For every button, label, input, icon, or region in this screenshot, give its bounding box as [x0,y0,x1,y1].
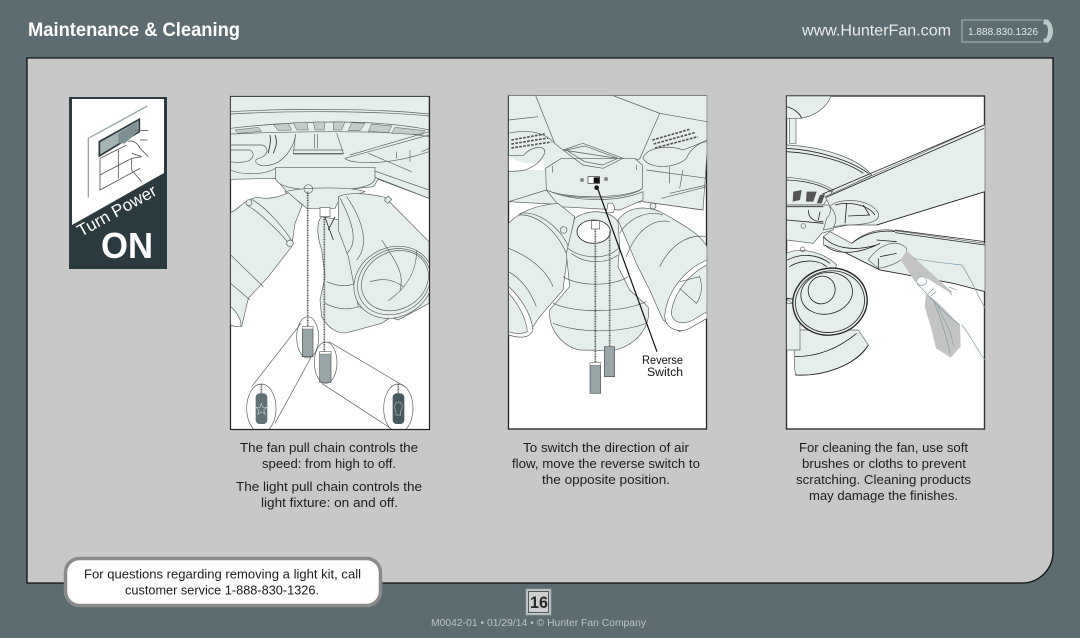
page number: 16 [530,593,548,612]
phone number badge [962,20,1053,42]
pull chains [590,221,615,393]
page number [526,590,550,614]
reverse switch label [642,355,683,379]
website address: www.HunterFan.com [801,22,951,40]
reverse switch label: Switch [647,367,683,379]
text: cleaning instructions: may damage the finishes. [809,488,958,503]
panel: pull chains illustration [230,96,446,433]
title: Maintenance & Cleaning [28,20,240,41]
text: pull chain instructions: speed: from high to off. [262,456,396,471]
panel: cleaning illustration [786,96,985,429]
text: cleaning instructions: brushes or cloths to prevent [802,456,966,471]
icon: turn power on [69,97,167,269]
centre lamp [550,203,649,351]
callout: customer service [66,558,380,606]
text: cleaning instructions: scratching. Cleaning products [796,472,972,487]
right lamp [338,193,429,320]
callout: customer service: customer service 1-888-830-1326. [125,582,319,598]
icon: fan speed pull [256,393,267,424]
text: cleaning instructions: For cleaning the fan, use soft [799,440,968,455]
main content panel [27,58,1053,583]
text: reverse switch instructions: To switch the direction of air [523,440,690,455]
callout: customer service: For questions regarding removing a light kit, call [84,566,361,582]
footer: M0042-01 • 01/29/14 • © Hunter Fan Company [431,618,646,629]
phone number badge: 1.888.830.1326 [968,26,1038,38]
text: cleaning instructions [796,440,972,503]
upper blade [823,125,985,230]
text: pull chain instructions: light fixture: on and off. [261,495,398,510]
reverse switch pointer [594,185,657,352]
text: reverse switch instructions: flow, move the reverse switch to [512,456,700,471]
panel: reverse switch illustration [508,96,707,429]
ceiling canopy and housing [787,96,872,243]
lamps [787,247,873,375]
reverse switch label: Reverse [642,355,683,367]
turn power label: Turn Power [74,181,160,240]
text: reverse switch instructions [512,440,700,487]
text: pull chain instructions [236,440,422,510]
text: pull chain instructions: The fan pull chain controls the [240,440,418,455]
detail callouts [247,317,413,433]
fan body and blades [231,97,429,208]
cloth [901,251,961,358]
fan body and blades [509,96,707,210]
text: reverse switch instructions: the opposite position. [542,472,670,487]
rear lamp [318,217,390,334]
left lamp [509,203,575,337]
reverse switch [588,177,600,183]
left lamp [231,193,302,327]
icon: light bulb pull [393,393,404,424]
lower blade [823,230,985,292]
text: pull chain instructions: The light pull chain controls the [236,479,422,494]
fan pull chain [302,185,335,382]
wall switch illustration [88,106,148,197]
hand [913,258,985,360]
on label: ON [101,225,153,266]
right lamp [618,203,707,332]
